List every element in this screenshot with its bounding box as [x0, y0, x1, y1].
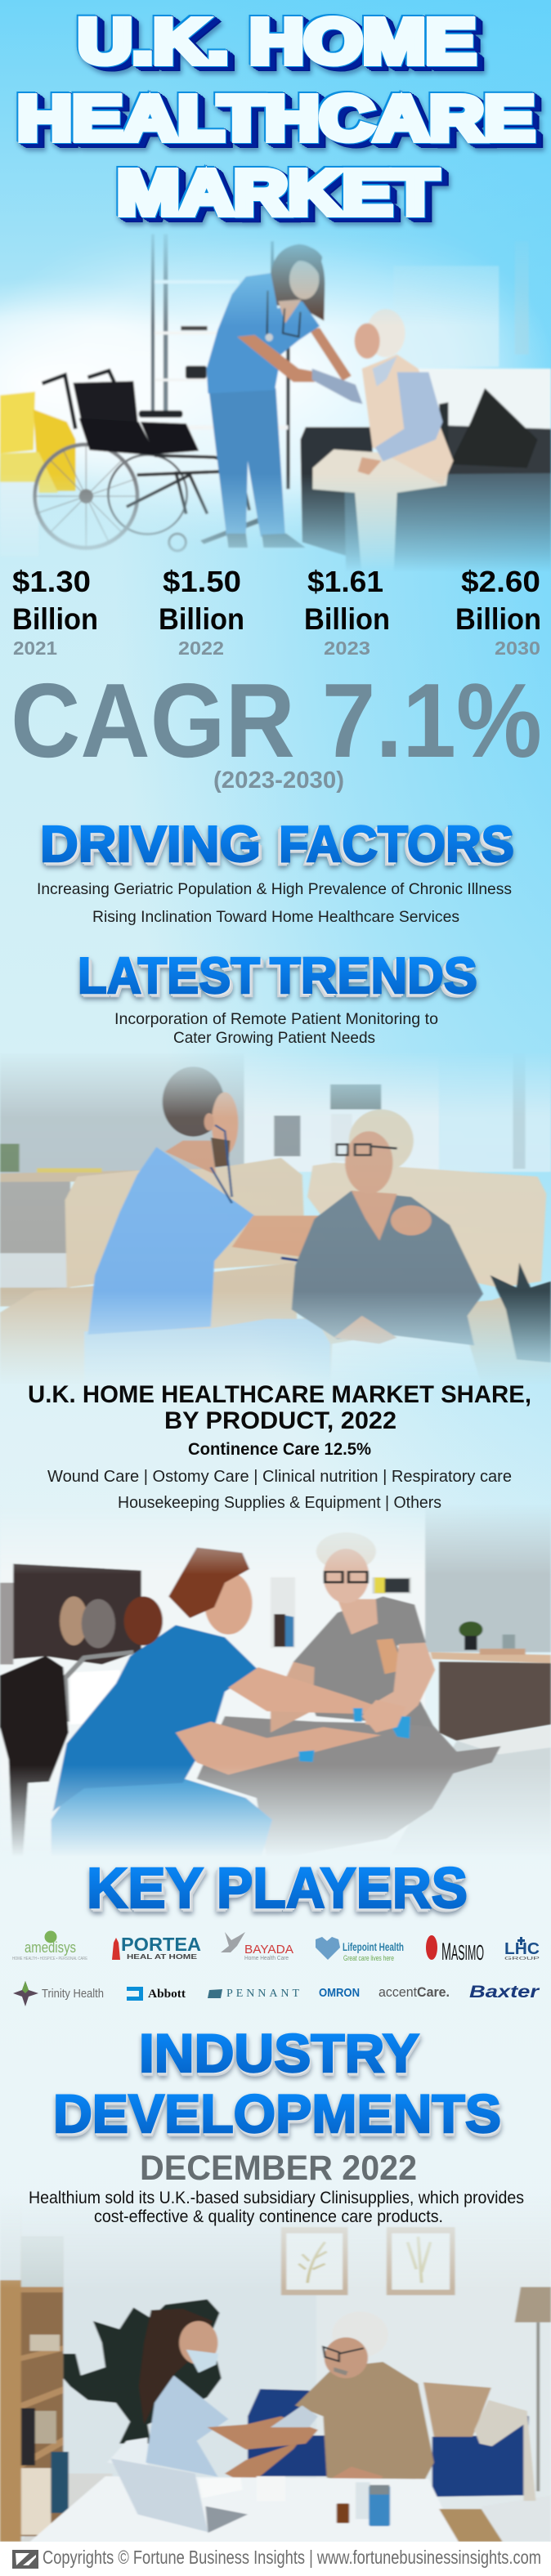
- driving factors text: Rising Inclination Toward Home Healthcare Services: [92, 908, 459, 926]
- wheelchair: [35, 371, 265, 551]
- photo: nurse helping elderly man beside wheelchair: [0, 234, 551, 567]
- heading: industry developments: DEVELOPMENTS: [53, 2083, 501, 2144]
- plant: [63, 2299, 222, 2444]
- stat: 2022: $1.50: [163, 565, 241, 598]
- heading: driving factors: [40, 816, 514, 873]
- icon: fortune business insights logo: [12, 2550, 38, 2569]
- table and items: [30, 2458, 503, 2542]
- logo: lifepoint health: [316, 1937, 404, 1962]
- photo: nurse exercising patient with dumbbells: [0, 1501, 551, 1863]
- stat: 2030: [455, 565, 541, 659]
- heading: industry developments: [53, 2023, 501, 2144]
- stat: 2023: 2023: [324, 637, 370, 659]
- logo: portea: [112, 1934, 201, 1961]
- heading: industry developments: INDUSTRY: [139, 2023, 419, 2083]
- heading: market share by product: U.K. HOME HEALTHCARE MARKET SHARE,: [28, 1381, 531, 1408]
- CAGR figure: (2023-2030): [213, 767, 344, 794]
- development description: Healthium sold its U.K.-based subsidiary Clinisupplies, which provides: [29, 2189, 524, 2207]
- nurse: [51, 1547, 410, 1863]
- logo: bayada: Home Health Care: [244, 1956, 289, 1961]
- heading: driving factors: FACTORS: [279, 816, 514, 873]
- logo: trinity health: Trinity Health: [42, 1987, 104, 2001]
- logo: amedisys: HOME HEALTH • HOSPICE • PERSONAL CARE: [12, 1957, 88, 1961]
- heading: key players: PLAYERS: [217, 1856, 468, 1920]
- driving factors text: [37, 880, 512, 926]
- title: [17, 7, 535, 228]
- driving factors text: Increasing Geriatric Population & High Prevalence of Chronic Illness: [37, 880, 512, 898]
- stat: 2023: $1.61: [307, 565, 383, 598]
- photo: nurse measuring blood pressure of elderly man: [0, 2226, 551, 2542]
- logo: abbott: [127, 1987, 186, 2001]
- logo: amedisys: amedisys: [25, 1939, 76, 1956]
- bed and rail: [62, 1649, 551, 1835]
- yellow pillows: [0, 391, 75, 557]
- floor lamp: [515, 2287, 551, 2491]
- heading: driving factors: DRIVING: [40, 816, 261, 873]
- photo: doctor examining woman on sofa: [0, 1053, 551, 1391]
- stat: 2022: Billion: [159, 602, 244, 636]
- title: HEALTHCARE: [17, 83, 535, 154]
- logo: portea: PORTEA: [121, 1934, 201, 1955]
- stat: 2030: $2.60: [461, 565, 540, 598]
- heading: market share by product: BY PRODUCT, 2022: [164, 1407, 396, 1434]
- stat: 2021: Billion: [12, 602, 98, 636]
- segment list: Wound Care | Ostomy Care | Clinical nutrition | Respiratory care: [47, 1468, 512, 1486]
- nurse: [207, 244, 352, 548]
- patient: [292, 1109, 483, 1391]
- stat: 2021: $1.30: [12, 565, 91, 598]
- logo: abbott: Abbott: [148, 1988, 186, 2001]
- room: [0, 1501, 551, 1863]
- stat: 2023: Billion: [304, 602, 390, 636]
- nurse: [107, 2309, 318, 2484]
- stat: 2021: [12, 565, 98, 659]
- patient: [271, 1532, 435, 1733]
- heading: key players: [87, 1856, 468, 1920]
- heading: latest trends: LATEST: [78, 948, 260, 1004]
- logo: masimo: MASIMO: [441, 1939, 484, 1966]
- sofa: [248, 2382, 535, 2501]
- development description: cost-effective & quality continence care products.: [94, 2207, 443, 2226]
- logo: lhc group: GROUP: [504, 1957, 541, 1961]
- stat: 2022: 2022: [178, 637, 224, 659]
- stat: 2030: Billion: [455, 602, 541, 636]
- room: [0, 1053, 551, 1307]
- logo: baxter: Baxter: [469, 1983, 540, 2001]
- stat: 2030: 2030: [495, 637, 540, 659]
- segment list: [47, 1468, 512, 1512]
- logo: pennant: PENNANT: [226, 1988, 299, 2000]
- elderly man: [312, 309, 453, 575]
- logo: lifepoint health: Lifepoint Health: [343, 1941, 404, 1953]
- heading: latest trends: [78, 948, 477, 1004]
- segment list: Housekeeping Supplies & Equipment | Others: [118, 1494, 441, 1512]
- logo: bayada: [221, 1932, 293, 1961]
- logo: lifepoint health: Great care lives here: [343, 1954, 394, 1962]
- elderly man: [271, 2311, 434, 2490]
- date: DECEMBER 2022: [140, 2149, 417, 2188]
- latest trends text: Incorporation of Remote Patient Monitoring to: [114, 1010, 438, 1028]
- heading: latest trends: TRENDS: [270, 948, 477, 1004]
- blanket: [197, 1716, 500, 1861]
- footer bar: [0, 2542, 551, 2576]
- room wall: [20, 2239, 551, 2542]
- latest trends text: [114, 1010, 438, 1047]
- framed pictures: [281, 2227, 455, 2295]
- stat: 2023: [304, 565, 390, 659]
- development description: [29, 2189, 524, 2226]
- doctor: [83, 1067, 330, 1370]
- bookshelf: [0, 2237, 70, 2542]
- stat: 2022: [159, 565, 244, 659]
- logo: lhc group: LHC: [504, 1940, 540, 1958]
- sofa: [0, 1158, 551, 1388]
- heading: market share by product: [28, 1381, 531, 1434]
- logo: masimo: [426, 1935, 484, 1966]
- title: MARKET: [117, 158, 438, 228]
- sofa: [300, 388, 551, 575]
- chair: [0, 1656, 69, 1863]
- latest trends text: Cater Growing Patient Needs: [173, 1029, 375, 1047]
- logo: lhc group: [504, 1937, 541, 1961]
- logo: amedisys: [12, 1930, 88, 1961]
- title: U.K. HOME: [78, 7, 476, 77]
- stat: 2021: 2021: [13, 637, 57, 659]
- logo: accentcare: accentCare.: [379, 1984, 450, 2000]
- logo: trinity health: [13, 1981, 104, 2006]
- room wall: [0, 234, 551, 543]
- logo: portea: HEAL AT HOME: [127, 1952, 197, 1961]
- object: exercise device: [491, 1263, 551, 1362]
- logo: bayada: BAYADA: [244, 1943, 293, 1957]
- logo: omron: OMRON: [319, 1986, 360, 2000]
- segment share: Continence Care 12.5%: [188, 1440, 371, 1459]
- heading: key players: KEY: [87, 1856, 204, 1920]
